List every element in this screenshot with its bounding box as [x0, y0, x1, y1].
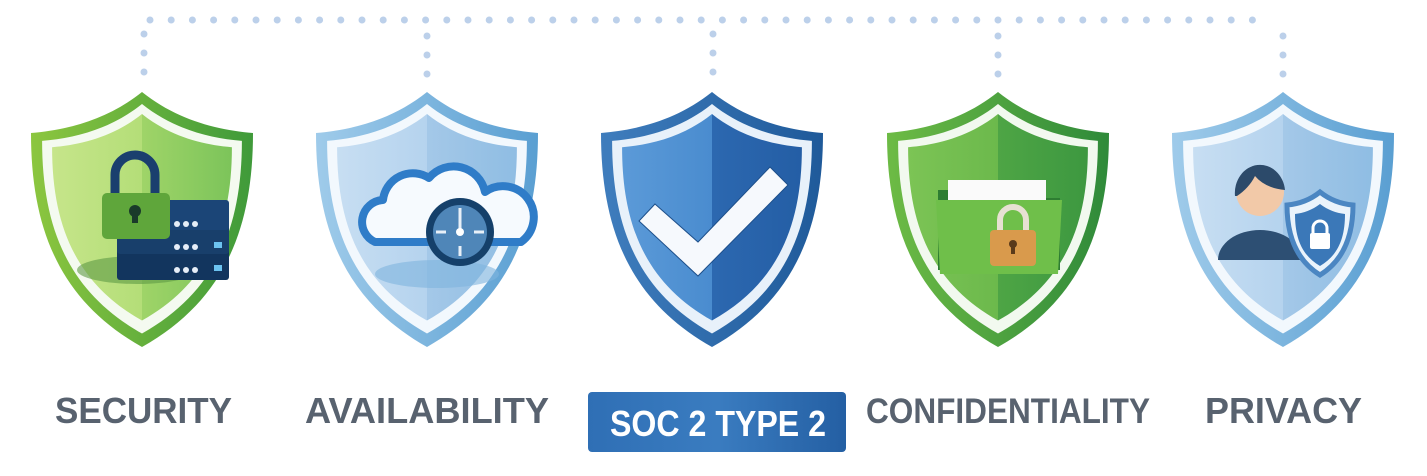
label: CONFIDENTIALITY: CONFIDENTIALITY: [866, 392, 1150, 431]
label: PRIVACY: PRIVACY: [1205, 390, 1362, 431]
icon: folder with lock: [936, 180, 1062, 274]
shield: security: [31, 92, 253, 347]
label: AVAILABILITY: AVAILABILITY: [305, 390, 549, 431]
shield: availability: [316, 92, 538, 347]
shield: SOC 2 checkmark: [601, 92, 823, 347]
label: SOC 2 TYPE 2 badge: [588, 392, 846, 452]
icon: cloud with clock: [362, 166, 534, 288]
connector: dotted lines: [144, 20, 1283, 76]
shield: confidentiality: [887, 92, 1109, 347]
icon: person with shield: [1218, 165, 1353, 275]
shield: privacy: [1172, 92, 1394, 347]
icon: checkmark: [639, 167, 788, 276]
label: SOC 2 TYPE 2 badge: SOC 2 TYPE 2: [610, 403, 826, 444]
icon: lock and servers: [77, 155, 229, 284]
label: SECURITY: SECURITY: [55, 390, 232, 431]
